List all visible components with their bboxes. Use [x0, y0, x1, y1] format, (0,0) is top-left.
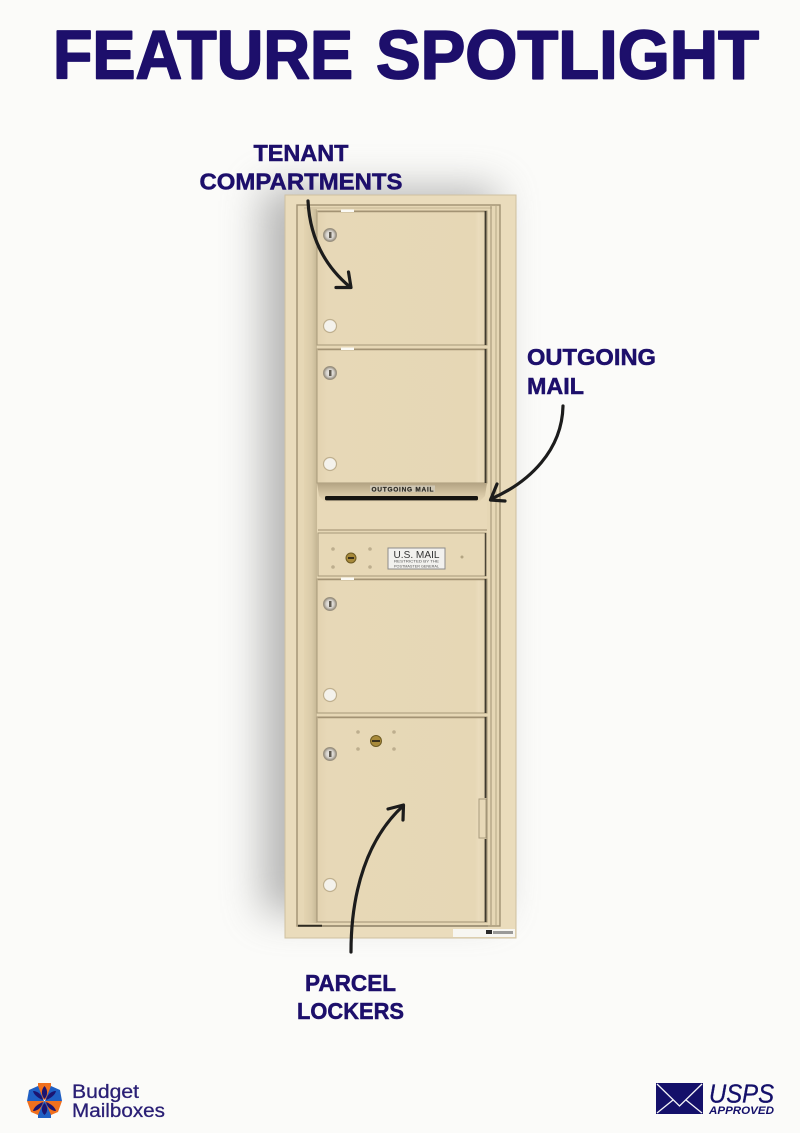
outgoing mail slot: OUTGOING MAIL [372, 486, 434, 493]
manufacturer label [453, 929, 515, 937]
arrow: parcel lockers [351, 805, 404, 952]
label: outgoing mail [527, 344, 656, 399]
U.S. Mail plate: U.S. MAIL [394, 549, 440, 561]
arrow: tenant compartments [308, 201, 351, 288]
outgoing mail slot [317, 483, 487, 530]
icon: logo flower [27, 1083, 62, 1118]
door: parcel locker [317, 717, 487, 922]
bottom frame shadow [298, 925, 322, 927]
door: tenant compartment 1 [317, 210, 487, 345]
U.S. Mail plate: POSTMASTER GENERAL [394, 564, 440, 568]
label: tenant compartments: TENANT [254, 140, 348, 166]
door: tenant compartment 3 [317, 578, 487, 713]
arrow: outgoing mail [490, 406, 563, 501]
title [53, 16, 759, 94]
logo: Budget Mailboxes [27, 1082, 165, 1122]
U.S. Mail plate: RESTRICTED BY THE [394, 558, 439, 564]
logo: Budget Mailboxes: Mailboxes [72, 1101, 165, 1122]
mailbox unit [262, 188, 516, 938]
logo: USPS approved: USPS [709, 1078, 775, 1108]
label: tenant compartments: COMPARTMENTS [200, 168, 402, 194]
title: FEATURE [53, 16, 353, 94]
label: outgoing mail: OUTGOING [527, 344, 656, 370]
U.S. Mail plate [388, 548, 445, 569]
outer frame [285, 195, 516, 938]
label: outgoing mail: MAIL [527, 373, 584, 399]
label: parcel lockers: LOCKERS [297, 998, 404, 1024]
label: parcel lockers: PARCEL [305, 970, 396, 996]
logo: USPS approved: APPROVED [708, 1105, 774, 1117]
title: SPOTLIGHT [376, 16, 759, 94]
postmaster panel [318, 533, 486, 576]
logo: USPS approved [656, 1078, 775, 1117]
label: parcel lockers [297, 970, 404, 1024]
door: tenant compartment 2 [317, 348, 487, 483]
logo: Budget Mailboxes: Budget [72, 1082, 140, 1103]
icon: envelope [656, 1083, 703, 1114]
label: tenant compartments [200, 140, 402, 194]
